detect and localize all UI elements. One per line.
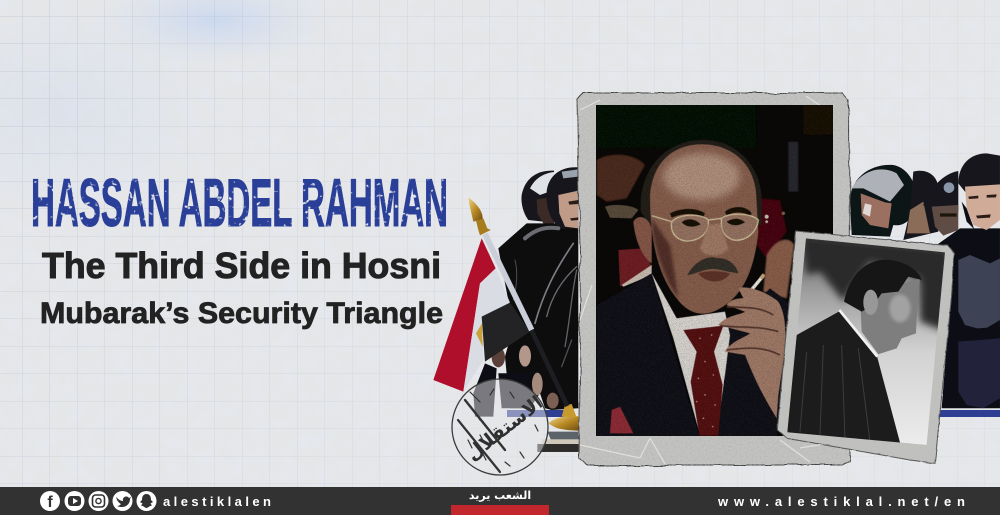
- nose: [700, 223, 728, 255]
- officer helmet front: [546, 167, 578, 228]
- uniform highlights: [513, 228, 577, 367]
- secondary photo: [783, 235, 950, 445]
- right blue bar: [939, 410, 1000, 417]
- officer helmet rear: [521, 171, 554, 227]
- forehead highlight: [663, 153, 740, 200]
- Egyptian flag: [433, 197, 567, 406]
- icon: snapchat: [136, 491, 156, 511]
- secondary torn frame: [777, 231, 954, 463]
- cheek shadow: [652, 218, 678, 298]
- riot helmet one: [850, 165, 916, 237]
- frame creases: [580, 96, 848, 464]
- flag eagle: [476, 323, 483, 347]
- flag finial: [468, 197, 491, 235]
- hand: [718, 287, 785, 418]
- flag pole: [485, 234, 567, 406]
- officer hands: [492, 345, 559, 409]
- icon: instagram: [88, 491, 108, 511]
- portrait backdrop: [597, 105, 833, 298]
- eyes: [682, 219, 745, 227]
- portrait face: [650, 144, 758, 314]
- Mubarak hair: [844, 260, 922, 312]
- main portrait photo: [596, 105, 833, 438]
- social handle: alestiklalen: [163, 494, 271, 509]
- portrait suit: [597, 273, 792, 438]
- shirt collar: [839, 310, 877, 357]
- emblem ornament strokes: [458, 389, 538, 472]
- dark legs: [473, 363, 532, 417]
- main photo frame: [577, 93, 850, 465]
- eyebrows: [670, 207, 752, 218]
- officer body: [498, 223, 578, 410]
- subtitle line two: Mubarak’s Security Triangle: [40, 297, 443, 330]
- cigarette: [750, 273, 766, 290]
- portrait shirt: [652, 273, 730, 435]
- flag stand base: [537, 404, 580, 452]
- hand creases: [720, 307, 780, 355]
- social icons: [40, 491, 156, 511]
- riot helmet three: [923, 171, 958, 236]
- footer bar: [0, 487, 1000, 515]
- icon: youtube: [64, 491, 84, 511]
- torn paper frame: [577, 93, 850, 465]
- infographic canvas: HASSAN ABDEL RAHMAN: [31, 165, 448, 241]
- secondary photo frame: [777, 231, 954, 463]
- blurred foliage: [800, 235, 950, 332]
- icon: facebook: f: [47, 494, 53, 511]
- flag white stripe: [463, 268, 510, 392]
- lips: [698, 271, 730, 281]
- police group left: [473, 167, 578, 417]
- tie: [683, 326, 723, 436]
- icon: twitter: [112, 491, 132, 511]
- Mubarak suit: [783, 311, 901, 445]
- flag black stripe: [482, 303, 530, 362]
- subtitle line one: The Third Side in Hosni: [42, 245, 441, 286]
- riot helmet four: [958, 153, 1000, 245]
- Mubarak face: [860, 278, 920, 354]
- eyeglasses: [652, 214, 758, 241]
- riot officer body armor: [937, 228, 1000, 408]
- emblem calligraphy: الاستقلال: [462, 391, 548, 465]
- riot helmet two: [903, 171, 938, 240]
- Mubarak ear: [863, 290, 878, 315]
- seal emblem: [452, 379, 548, 475]
- suit pinstripes: [800, 345, 870, 442]
- red tab: [451, 505, 549, 515]
- flag red stripe: [433, 238, 496, 392]
- portrait ear: [633, 217, 652, 263]
- moustache: [687, 257, 738, 275]
- website url: www.alestiklal.net/en: [717, 494, 965, 509]
- slogan: الشعب يريد: [469, 489, 531, 502]
- portrait hair: [640, 140, 762, 225]
- face highlight: [889, 294, 911, 322]
- left blue bar: [507, 410, 564, 417]
- police group right: [850, 153, 1000, 408]
- pocket square: [610, 407, 633, 433]
- tie dots: [696, 334, 716, 427]
